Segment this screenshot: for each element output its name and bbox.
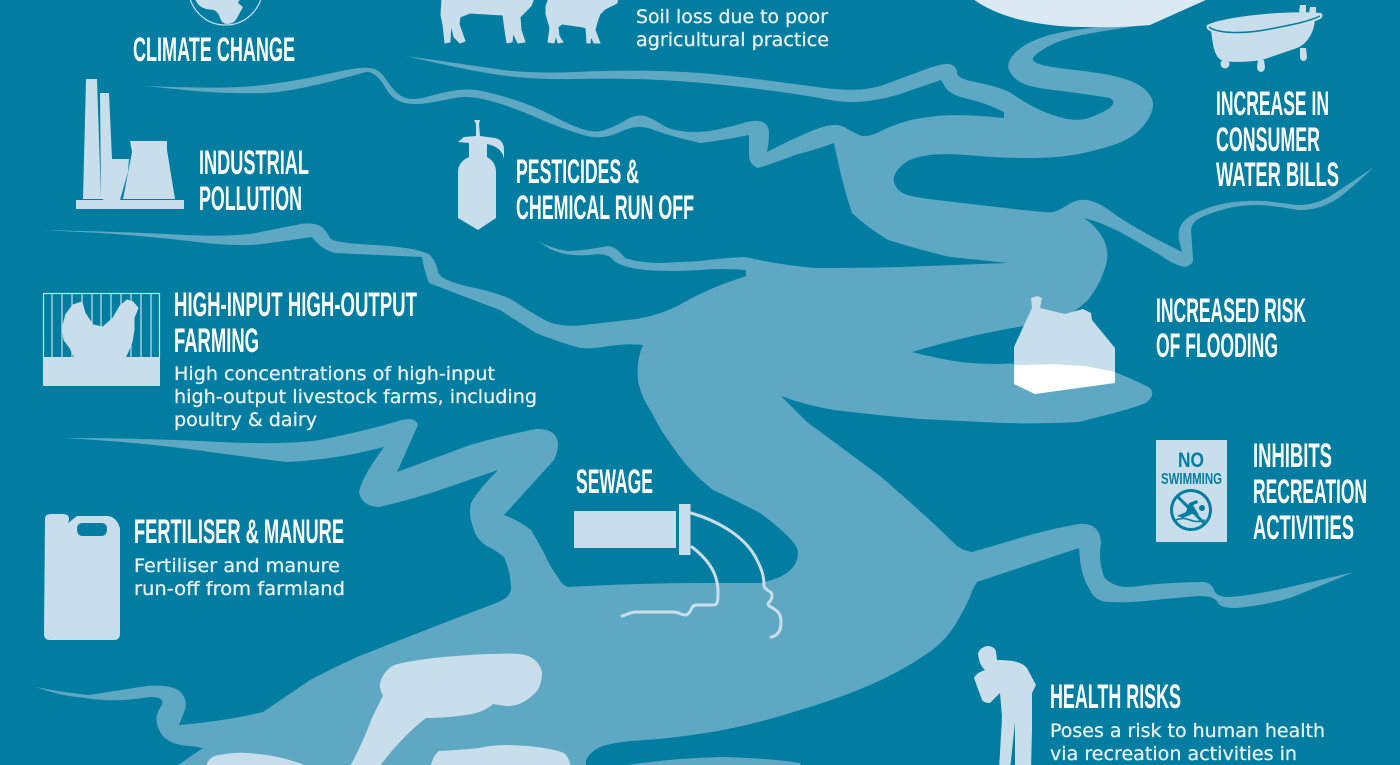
lakes at river mouth (206, 654, 571, 765)
icon: no swimming sign: SWIMMING (1161, 471, 1222, 488)
description (174, 363, 537, 431)
panel: health risks (974, 646, 1325, 765)
description: high-output livestock farms, including (174, 386, 537, 408)
icon: power station (76, 79, 184, 209)
heading: CHEMICAL RUN OFF (516, 189, 694, 227)
heading (199, 144, 309, 218)
heading: CLIMATE CHANGE (133, 31, 295, 69)
icon: outfall pipe (574, 504, 781, 637)
description: High concentrations of high-input (174, 363, 495, 385)
panel: pesticides (458, 120, 694, 230)
heading (1253, 437, 1367, 547)
icon: caged hen (43, 293, 160, 386)
icon: coughing man (974, 646, 1036, 765)
icon: globe (188, 0, 262, 25)
heading: PESTICIDES & (516, 153, 639, 191)
description: Fertiliser and manure (134, 555, 340, 577)
icon: cow (441, 0, 534, 43)
heading: FERTILISER & MANURE (134, 513, 344, 551)
panel: soil loss (441, 0, 829, 51)
panel: climate change (134, 0, 294, 62)
icon: spray bottle (458, 120, 504, 230)
icon: no swimming sign (1156, 440, 1227, 542)
description (636, 6, 829, 51)
heading: OF FLOODING (1156, 327, 1278, 365)
panel: sewage (574, 463, 781, 637)
description: run-off from farmland (134, 578, 345, 600)
icon: no swimming sign: NO (1178, 449, 1204, 472)
panel: fertiliser and manure (44, 513, 345, 640)
description (1050, 720, 1325, 765)
heading (174, 286, 417, 360)
panel: high-input high-output farming (43, 286, 537, 431)
heading (516, 153, 694, 227)
panel: flooding (1014, 292, 1306, 394)
heading: HIGH-INPUT HIGH-OUTPUT (174, 286, 417, 324)
heading (1216, 85, 1339, 194)
heading: SEWAGE (576, 463, 653, 501)
heading: INDUSTRIAL (199, 144, 309, 182)
heading: HEALTH RISKS (1050, 678, 1181, 716)
lake: top right light water (968, 0, 1217, 27)
heading (1156, 292, 1306, 365)
heading: POLLUTION (199, 180, 302, 218)
description: Poses a risk to human health (1050, 720, 1325, 742)
heading: INHIBITS (1253, 437, 1332, 475)
description: Soil loss due to poor (636, 6, 828, 28)
description (134, 555, 345, 600)
icon: sheep (546, 0, 618, 43)
description: poultry & dairy (174, 409, 317, 431)
description: agricultural practice (636, 29, 829, 51)
icon: bath tub (1206, 5, 1323, 72)
icon: jerry can (44, 514, 120, 640)
panel: consumer water bills (1206, 5, 1339, 194)
panel: industrial pollution (76, 79, 309, 218)
icon: flooded house (1014, 296, 1115, 394)
panel: recreation (1156, 437, 1367, 547)
description: via recreation activities in (1050, 743, 1297, 765)
heading: FARMING (174, 322, 259, 360)
